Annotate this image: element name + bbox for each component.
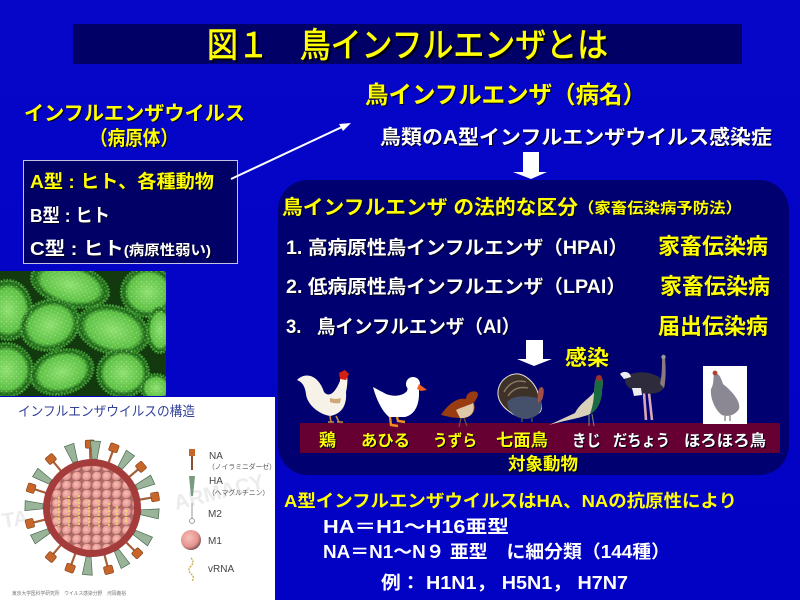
legend: vRNA: vRNA [208,564,234,575]
icon: ostrich [620,355,666,420]
type C: C型 : ヒト (病原性弱い) [30,238,211,259]
legend: M1 [181,530,222,550]
watermark [0,470,266,533]
bar: bird names [300,423,780,453]
virus particle [25,440,160,575]
legend: M1: M1 [208,536,222,547]
panel heading: （家畜伝染病予防法） [578,199,742,217]
text: antigenic subtypes: HA＝H1～H16亜型 [323,517,509,537]
arrow: type A to avian influenza [231,123,351,179]
text: antigenic subtypes: 例： H1N1， H5N1， H7N7 [381,573,628,593]
icon: duck [373,377,427,426]
labels: bird names: きじ [572,432,601,450]
icon: guinea fowl [703,366,747,424]
row 3: 届出伝染病 [658,314,768,339]
heading: influenza virus (pathogen) [24,102,245,150]
panel heading [282,196,742,219]
labels: bird names: うずら [433,432,477,450]
legend: NA: （ノイラミニダーゼ） [208,462,276,471]
row 1: 1. 高病原性鳥インフルエンザ（HPAI） [286,236,628,259]
legend: HA: （ヘマグルチニン） [208,488,269,497]
watermark: TA [0,506,30,533]
panel: virus structure diagram [0,397,276,600]
row 2: 家畜伝染病 [660,274,770,299]
text: type A avian influenza infection: 鳥類のA型インフルエンザウイルス感染症 [380,125,772,149]
text: antigenic subtypes: A型インフルエンザウイルスはHA、NAの抗原性により [284,491,737,511]
row 1: 家畜伝染病 [658,234,768,259]
type B: B型 : ヒト [30,205,110,226]
text: antigenic subtypes: NA＝N1～N９ 亜型 に細分類（144種） [323,542,670,562]
legend: HA: HA [209,476,223,487]
legend: M2 [190,503,222,524]
icon: turkey [498,374,544,422]
icon: quail [441,391,478,427]
icon: chicken [297,370,349,422]
title [73,24,742,65]
icon: pheasant [549,375,603,426]
legend: M2: M2 [208,509,222,520]
labels: bird names: だちょう [613,432,670,450]
labels: bird names: ほろほろ鳥 [684,431,766,450]
panel: virus types [24,160,238,264]
text: antigenic subtypes [284,491,737,593]
legend: HA [189,476,269,497]
labels: bird names [319,431,766,450]
title: 図１ 鳥インフルエンザとは [207,27,608,65]
row 2 [286,274,770,299]
arrow: down to legal classification [513,152,547,179]
diagram title: インフルエンザウイルスの構造 [18,404,195,419]
label: target animals: 対象動物 [508,454,578,474]
labels: bird names: 鶏 [319,431,336,450]
labels: bird names: 七面鳥 [496,431,548,450]
row 3: 3. 鳥インフルエンザ（AI） [286,315,520,338]
heading: avian influenza (disease name): 鳥インフルエンザ（病名） [365,82,646,109]
image: green virus micrograph [0,271,166,396]
credit: 東京大学医科学研究所 ウイルス感染分野 河岡義裕 [12,590,126,597]
labels: bird names: あひる [361,432,410,450]
label: infection: 感染 [565,346,609,370]
row 3 [286,314,768,339]
heading: influenza virus (pathogen): インフルエンザウイルス [24,102,245,125]
panel: legal classification [278,180,789,475]
type A: A型 : ヒト、各種動物 [30,171,214,192]
legend: NA [189,449,276,471]
row 2: 2. 低病原性鳥インフルエンザ（LPAI） [286,275,626,298]
legend: vRNA [189,558,234,581]
row 1 [286,234,768,259]
legend: NA: NA [209,451,223,462]
panel heading: 鳥インフルエンザ の法的な区分 [282,196,578,219]
arrow: infection [517,340,552,366]
watermark: ARMACY [172,470,266,515]
heading: influenza virus (pathogen): （病原体） [90,127,178,150]
